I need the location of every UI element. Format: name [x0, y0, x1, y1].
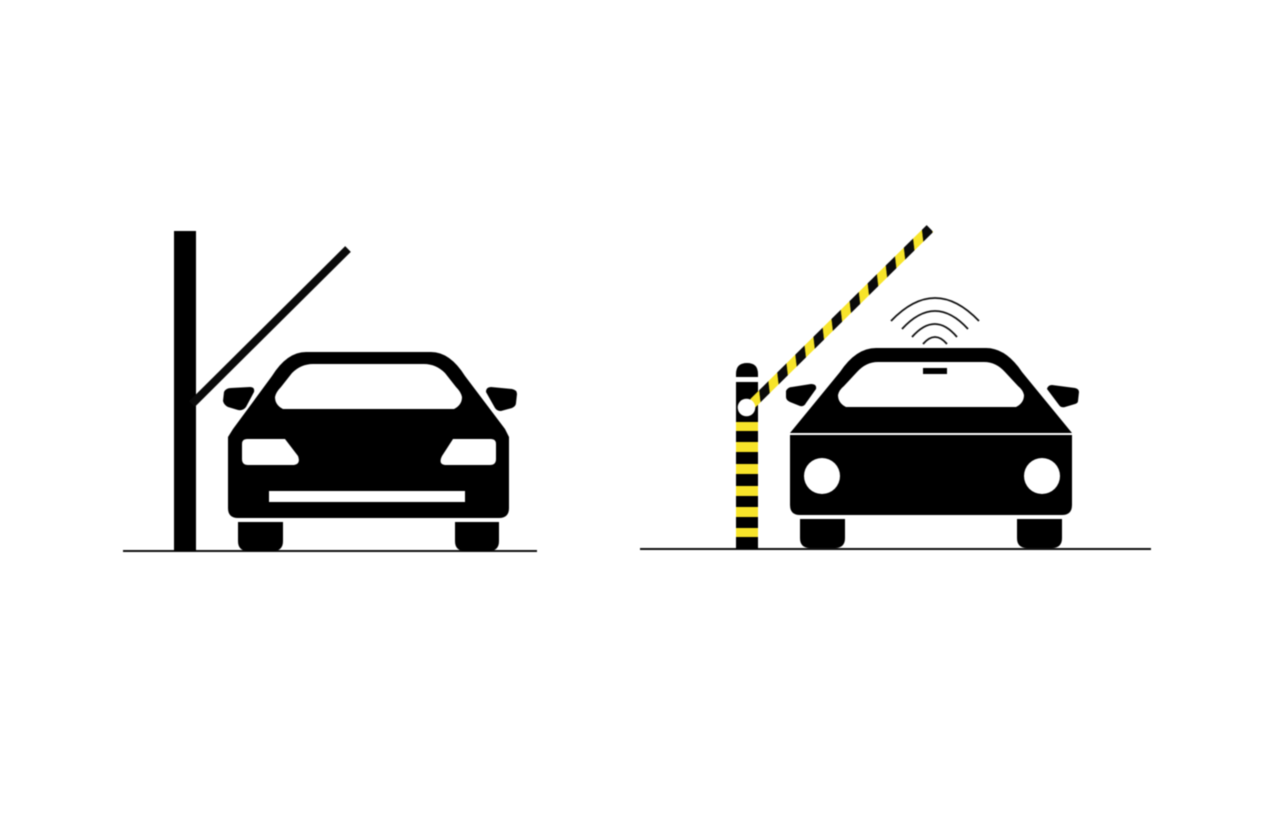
headlight right car, left side [804, 458, 840, 494]
mirror right car, right side [1047, 385, 1079, 407]
mirror left car, left side [223, 387, 254, 410]
post yellow stripes [736, 422, 758, 537]
post pivot [738, 399, 755, 416]
car left [223, 352, 517, 551]
mirror right car, left side [786, 384, 816, 406]
car right [786, 348, 1079, 548]
post body [736, 382, 758, 549]
wheel left car, right side [455, 522, 499, 551]
headlight left car, left side [242, 439, 299, 465]
scene: automatic barrier with car [640, 225, 1151, 550]
scene: manual barrier with car [123, 231, 537, 552]
windshield right [838, 362, 1024, 407]
headlight left car, right side [441, 439, 496, 465]
wireless signal [891, 298, 979, 344]
car roof right [790, 348, 1072, 433]
ground line left [123, 550, 537, 552]
boom arm striped [749, 225, 933, 407]
grille left car [269, 491, 465, 502]
car lower body right [790, 435, 1072, 515]
wheel right car, left side [800, 519, 845, 548]
wheel left car, left side [238, 522, 283, 551]
barrier post left [174, 231, 196, 551]
wheel right car, right side [1017, 519, 1062, 548]
toll sensor [923, 368, 947, 374]
mirror left car, right side [486, 387, 517, 411]
car body left [228, 352, 509, 518]
ground line right [640, 548, 1151, 550]
post cap [736, 363, 758, 377]
windshield left [275, 364, 462, 409]
headlight right car, right side [1024, 458, 1060, 494]
barrier post right [736, 363, 758, 549]
barrier arm left [192, 249, 348, 404]
